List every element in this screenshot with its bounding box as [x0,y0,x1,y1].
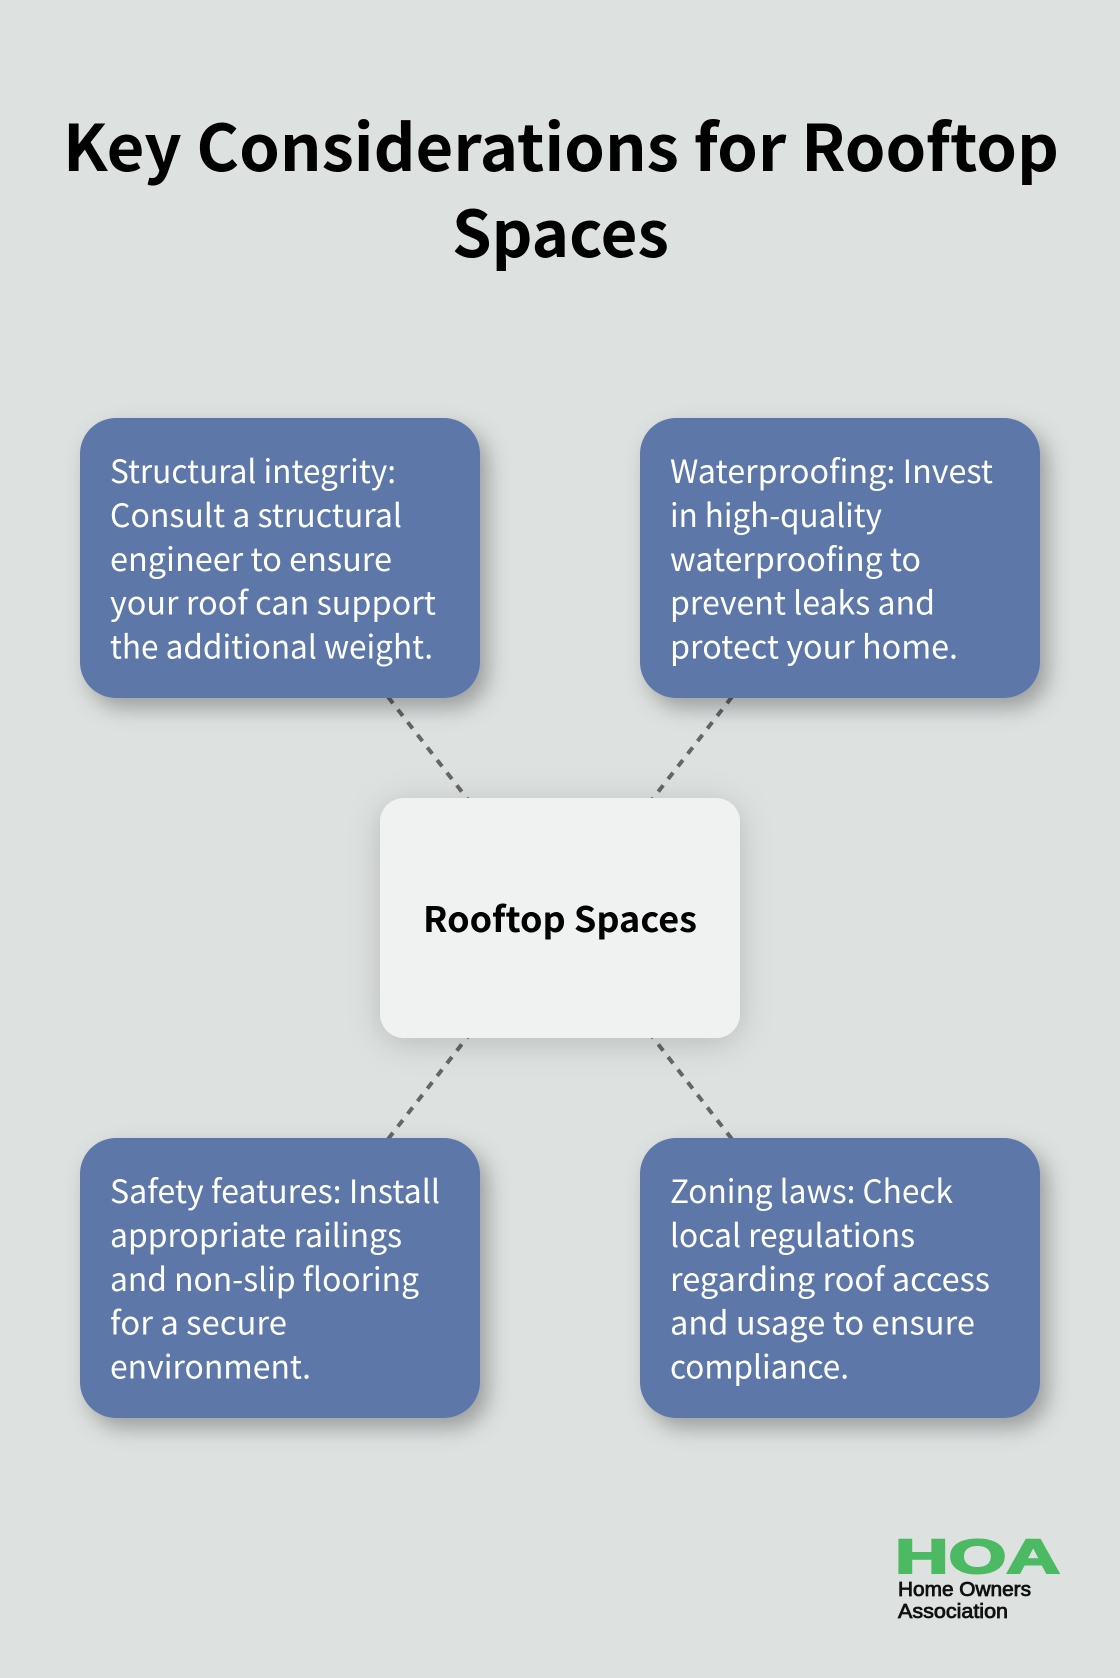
panel: structural integrity: the additional weight. [110,622,433,668]
panel: waterproofing: Waterproofing: Invest [670,447,993,493]
panel: structural integrity: your roof can support [110,578,436,624]
panel: waterproofing: protect your home. [670,622,958,668]
panel: zoning laws [640,1138,1040,1418]
panel: zoning laws: regarding roof access [670,1255,990,1301]
panel: central node: Rooftop Spaces [423,892,697,943]
panel: structural integrity [80,418,480,698]
panel: safety features [80,1138,480,1418]
title: Spaces [452,184,669,276]
panel: structural integrity: Structural integrity: [110,447,396,493]
panel: structural integrity: Consult a structural [110,491,402,537]
panel: zoning laws: Zoning laws: Check [670,1167,953,1213]
logo: HOA [895,1531,1060,1623]
title [63,98,1059,276]
title: Key Considerations for Rooftop [63,98,1059,190]
panel: waterproofing: prevent leaks and [670,578,935,624]
logo: HOA: Home Owners [898,1579,1031,1601]
panel: structural integrity: engineer to ensure [110,535,392,581]
panel: zoning laws: compliance. [670,1342,849,1388]
panel: waterproofing: waterproofing to [670,535,921,581]
panel: safety features: for a secure [110,1298,287,1344]
panel: safety features: and non-slip flooring [110,1255,419,1301]
panel: safety features: environment. [110,1342,311,1388]
panel: waterproofing: in high-quality [670,491,882,537]
panel: zoning laws: local regulations [670,1211,915,1257]
panel: safety features: appropriate railings [110,1211,402,1257]
logo: HOA: Association [898,1601,1008,1623]
panel: waterproofing [640,418,1040,698]
panel: zoning laws: and usage to ensure [670,1298,975,1344]
dashed connectors [280,558,840,1278]
panel: central node [380,798,740,1038]
panel: safety features: Safety features: Install [110,1167,440,1213]
logo: HOA: HOA [895,1531,1060,1584]
